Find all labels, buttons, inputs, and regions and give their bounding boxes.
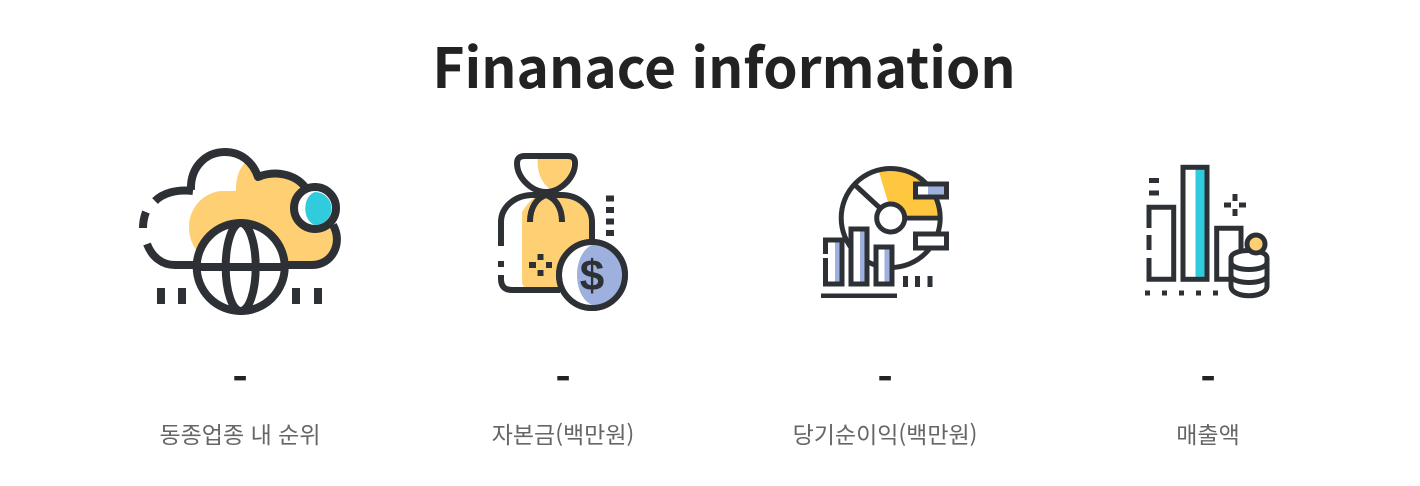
icon: cloud with globe: [143, 152, 337, 311]
label: capital: 자본금(백만원): [492, 416, 634, 450]
label: revenue: 매출액: [1176, 416, 1240, 450]
value: rank: -: [232, 346, 248, 407]
value: net income: -: [877, 346, 893, 407]
title: Finanace information: [432, 24, 1016, 104]
label: rank: 동종업종 내 순위: [159, 416, 321, 450]
icon: money bag: [501, 156, 625, 308]
dollar sign: $: [580, 252, 604, 300]
value: revenue: -: [1200, 346, 1216, 407]
icon: bar chart with coins: [1145, 167, 1267, 296]
label: net income: 당기순이익(백만원): [793, 416, 977, 450]
icon: pie chart with bars: [821, 168, 946, 296]
value: capital: -: [555, 346, 571, 407]
